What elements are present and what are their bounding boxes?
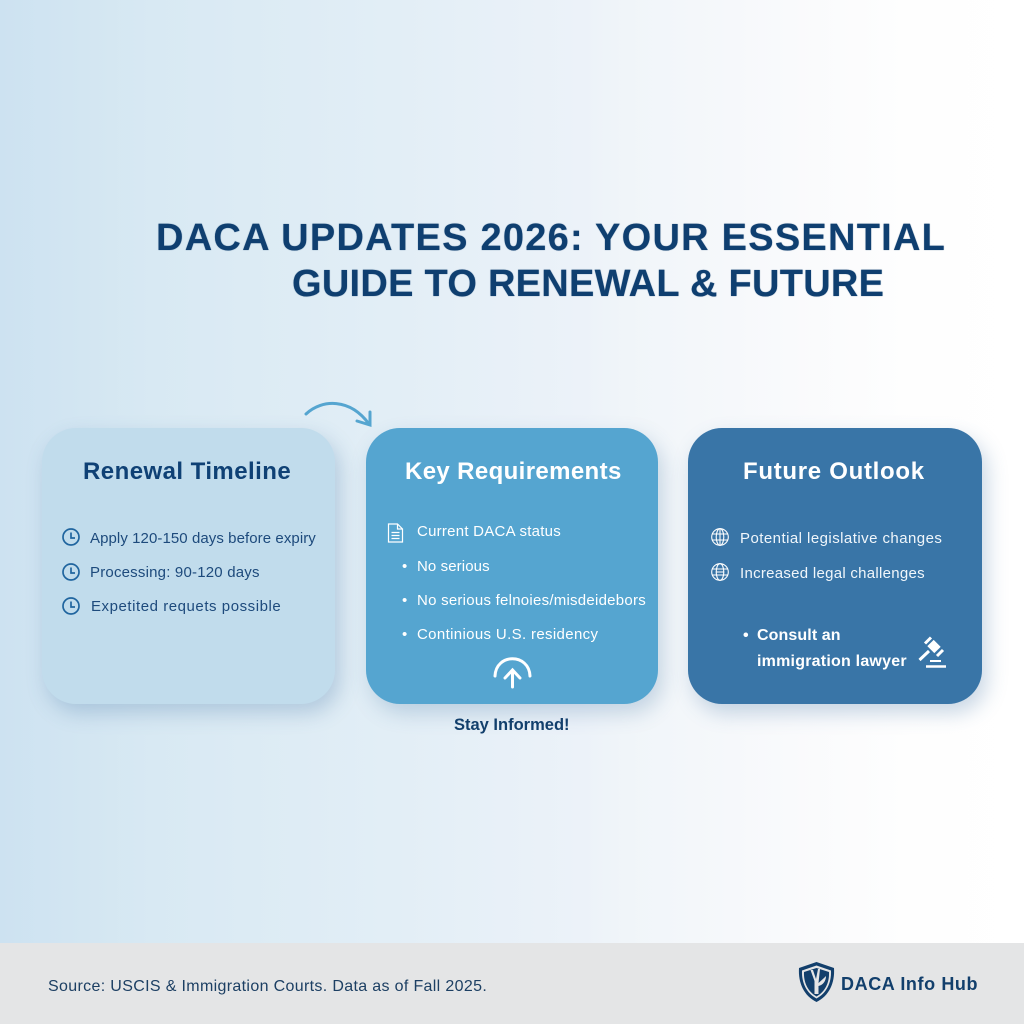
list item: expedited requests: Expetited requets possible xyxy=(91,598,281,615)
source note: Source: USCIS & Immigration Courts. Data as of Fall 2025. xyxy=(48,978,487,995)
panel: future outlook xyxy=(688,428,982,704)
icon: upload arrow arc xyxy=(494,657,532,688)
logo: DACA Info Hub xyxy=(798,962,978,1002)
callout: consult a lawyer xyxy=(743,627,907,670)
callout: consult a lawyer: • xyxy=(743,627,749,644)
list item: continuous residency: • xyxy=(402,626,407,643)
list item: apply window: Apply 120-150 days before expiry xyxy=(90,530,316,547)
callout: consult a lawyer: immigration lawyer xyxy=(757,653,907,670)
list item: legal challenges: Increased legal challenges xyxy=(740,565,925,582)
panel: key requirements xyxy=(366,428,658,704)
arrow: curved connector xyxy=(304,402,372,427)
icon: shield xyxy=(798,962,834,1002)
logo: DACA Info Hub: DACA Info Hub xyxy=(841,974,978,994)
title: GUIDE TO RENEWAL & FUTURE xyxy=(292,263,884,305)
list item: legislative changes: Potential legislative changes xyxy=(740,530,942,547)
title: DACA UPDATES 2026: YOUR ESSENTIAL xyxy=(156,217,946,259)
list item: processing: Processing: 90-120 days xyxy=(90,564,260,581)
heading: future outlook: Future Outlook xyxy=(743,458,925,485)
list item: continuous residency: Continious U.S. residency xyxy=(417,626,598,643)
title xyxy=(156,217,946,305)
heading: renewal timeline: Renewal Timeline xyxy=(83,458,291,485)
icon: gavel xyxy=(918,636,946,668)
list item: no felonies: • xyxy=(402,592,407,609)
caption: stay informed: Stay Informed! xyxy=(454,716,570,734)
list item: no serious: No serious xyxy=(417,558,490,575)
heading: key requirements: Key Requirements xyxy=(405,458,622,485)
footer band xyxy=(0,943,1024,1024)
panel: renewal timeline xyxy=(42,428,335,704)
list item: no serious: • xyxy=(402,558,407,575)
list item: current status: Current DACA status xyxy=(417,523,561,540)
list item: no felonies: No serious felnoies/misdeidebors xyxy=(417,592,646,609)
callout: consult a lawyer: Consult an xyxy=(757,627,841,644)
